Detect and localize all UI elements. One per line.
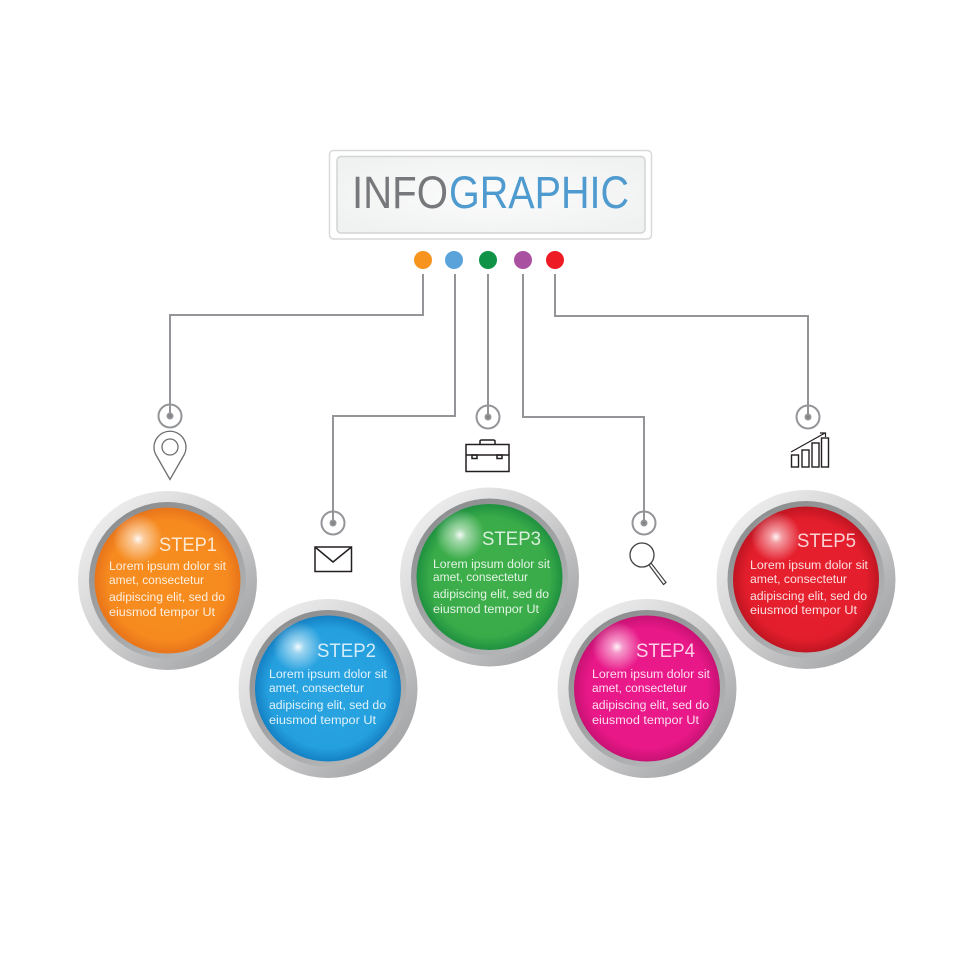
icon: map pin	[154, 431, 186, 480]
step 3 text: amet, consectetur	[433, 570, 528, 584]
step 1 text: Lorem ipsum dolor sit	[109, 559, 227, 573]
step 4 text: adipiscing elit, sed do	[592, 698, 709, 712]
step 1 text	[109, 559, 227, 619]
connector end markers	[158, 404, 820, 534]
step 3 text: eiusmod tempor Ut	[433, 602, 540, 616]
title: INFO	[352, 167, 448, 218]
step 5 text: adipiscing elit, sed do	[750, 589, 867, 603]
step 3 text: Lorem ipsum dolor sit	[433, 557, 551, 571]
step 5 heading: STEP5	[797, 531, 856, 552]
step 2 text: amet, consectetur	[269, 681, 364, 695]
colour dots	[414, 251, 564, 269]
step 2 text	[269, 667, 388, 727]
panel: step 5	[716, 490, 896, 669]
icon: growth chart	[791, 433, 828, 467]
step 2 text: adipiscing elit, sed do	[269, 698, 386, 712]
step 4 heading: STEP4	[636, 641, 695, 662]
step 2 text: Lorem ipsum dolor sit	[269, 667, 388, 681]
icon: envelope	[315, 547, 352, 572]
step 2 text: eiusmod tempor Ut	[269, 713, 377, 727]
icon: briefcase	[466, 440, 509, 472]
step 3 heading: STEP3	[482, 529, 541, 550]
step 4 text	[592, 667, 711, 727]
step 1 text: adipiscing elit, sed do	[109, 590, 225, 604]
step 3 text	[433, 557, 551, 616]
panel: step 2	[238, 599, 418, 778]
step 5 text: amet, consectetur	[750, 572, 847, 586]
step 4 text: Lorem ipsum dolor sit	[592, 667, 711, 681]
icon: magnifier	[630, 543, 666, 584]
step 4 text: amet, consectetur	[592, 681, 687, 695]
panel: step 1	[78, 491, 257, 670]
step 5 text: Lorem ipsum dolor sit	[750, 558, 869, 572]
step 1 heading: STEP1	[159, 535, 217, 556]
title	[352, 167, 629, 218]
step 5 text: eiusmod tempor Ut	[750, 603, 858, 617]
step 2 heading: STEP2	[317, 641, 376, 662]
title box	[330, 150, 652, 239]
step 1 text: eiusmod tempor Ut	[109, 605, 216, 619]
connector lines	[170, 274, 808, 523]
panel: step 4	[558, 599, 736, 778]
title: GRAPHIC	[449, 167, 629, 218]
step 5 text	[750, 558, 869, 617]
panel: step 3	[400, 488, 579, 666]
step 3 text: adipiscing elit, sed do	[433, 587, 549, 601]
step 4 text: eiusmod tempor Ut	[592, 713, 700, 727]
step 1 text: amet, consectetur	[109, 573, 204, 587]
